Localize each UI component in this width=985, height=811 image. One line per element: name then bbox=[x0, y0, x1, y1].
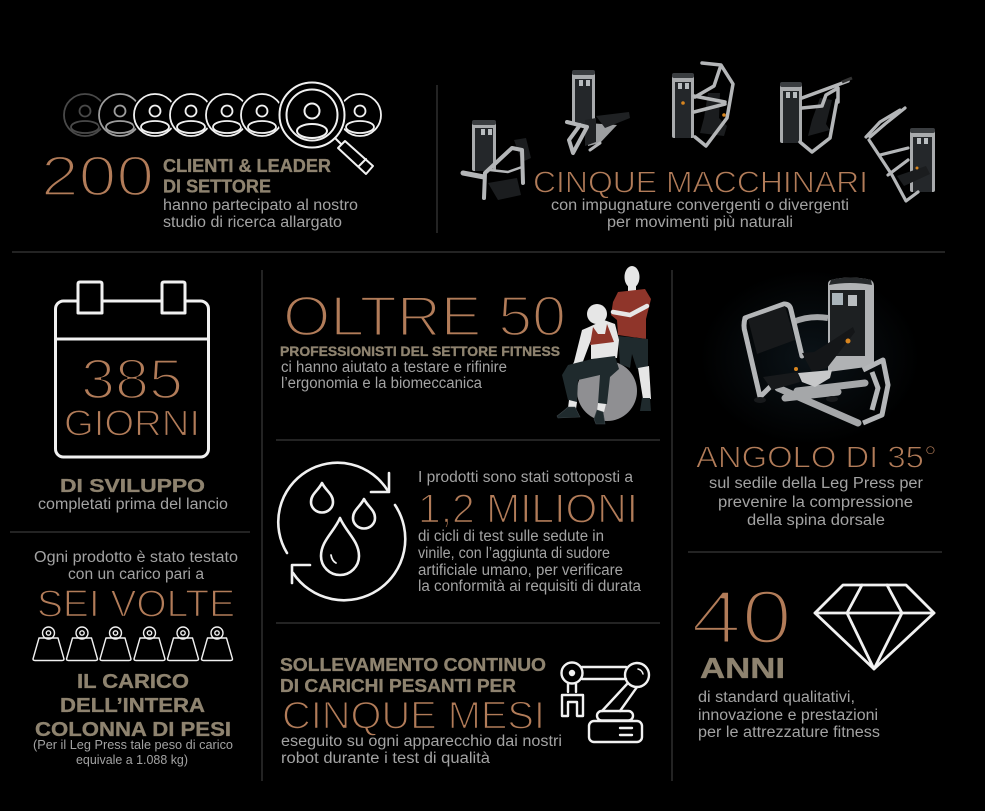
icon: row of people under magnifier bbox=[64, 80, 381, 174]
heading: cinque mesi: CINQUE MESI bbox=[282, 694, 545, 738]
text: professionals description: l’ergonomia e la biomeccanica bbox=[281, 375, 482, 392]
panel: 1.2 million cycles bbox=[278, 463, 641, 600]
text: angle description: sul sedile della Leg Press per bbox=[709, 475, 923, 492]
text: angle description: della spina dorsale bbox=[747, 512, 885, 529]
text: machines description: per movimenti più naturali bbox=[607, 214, 793, 231]
text: years description: per le attrezzature fitness bbox=[698, 724, 880, 741]
heading: whole weight stack: COLONNA DI PESI bbox=[35, 719, 231, 741]
heading: anni: ANNI bbox=[700, 653, 785, 685]
panel: 385 days bbox=[38, 282, 228, 513]
text: angle description: prevenire la compressione bbox=[718, 494, 913, 511]
icon: robot arm bbox=[562, 662, 649, 742]
big number 40: 40 bbox=[691, 576, 792, 660]
heading: di sviluppo: DI SVILUPPO bbox=[60, 475, 205, 496]
text: cycles intro: I prodotti sono stati sottoposti a bbox=[418, 469, 633, 486]
text: professionals description bbox=[281, 359, 507, 392]
heading: continuous lifting bbox=[280, 654, 546, 696]
panel: 35 degree angle bbox=[696, 270, 937, 529]
heading: clients and leaders: CLIENTI & LEADER bbox=[163, 155, 331, 176]
text: professionals description: ci hanno aiutato a testare e rifinire bbox=[281, 359, 507, 376]
icons: six weights bbox=[33, 627, 232, 660]
illustration: two athletes with ball bbox=[557, 266, 651, 424]
image: machine 1 bbox=[463, 120, 531, 200]
heading: angolo di 35: ANGOLO DI 35° bbox=[696, 440, 937, 474]
text: robots description: robot durante i test di qualità bbox=[281, 750, 490, 767]
image: machine 5 bbox=[866, 108, 935, 201]
heading: whole weight stack bbox=[35, 671, 231, 741]
text: robots description bbox=[281, 733, 562, 767]
text: leg press note bbox=[33, 737, 233, 767]
big number 200: 200 bbox=[41, 144, 154, 208]
text: load intro bbox=[34, 549, 238, 583]
panel: six times load bbox=[33, 549, 238, 767]
heading: continuous lifting: DI CARICHI PESANTI PER bbox=[280, 675, 516, 696]
image: leg press machine bbox=[744, 278, 888, 423]
text: angle description bbox=[709, 475, 923, 529]
text: cycles description: la conformità ai requisiti di durata bbox=[418, 578, 641, 595]
heading: whole weight stack: IL CARICO bbox=[77, 671, 189, 693]
text: cycles description: artificiale umano, per verificare bbox=[418, 562, 623, 579]
label giorni: GIORNI bbox=[64, 402, 200, 444]
panel: over 50 professionals bbox=[280, 266, 651, 424]
text: clients description: studio di ricerca allargato bbox=[163, 214, 342, 231]
text: leg press note: (Per il Leg Press tale peso di carico bbox=[33, 737, 233, 752]
heading: continuous lifting: SOLLEVAMENTO CONTINUO bbox=[280, 654, 546, 675]
text: years description: innovazione e prestazioni bbox=[698, 707, 878, 724]
heading: cinque macchinari: CINQUE MACCHINARI bbox=[533, 164, 868, 200]
text: development description: completati prima del lancio bbox=[38, 496, 228, 513]
text: cycles description bbox=[418, 528, 641, 595]
heading: whole weight stack: DELL’INTERA bbox=[60, 695, 205, 717]
icon: diamond bbox=[815, 585, 934, 669]
text: machines description bbox=[551, 197, 849, 231]
icon: sweat drops in cycle arrows bbox=[278, 463, 405, 600]
text: load intro: Ogni prodotto è stato testato bbox=[34, 549, 238, 566]
big number 385: 385 bbox=[81, 348, 183, 412]
panel: 40 years bbox=[691, 576, 934, 741]
icon: calendar bbox=[56, 282, 208, 457]
image: machine 4 bbox=[780, 78, 852, 152]
text: leg press note: equivale a 1.088 kg) bbox=[76, 752, 188, 767]
text: cycles description: di cicli di test sulle sedute in bbox=[418, 528, 604, 545]
heading: sei volte: SEI VOLTE bbox=[37, 584, 235, 626]
heading: 1,2 milioni: 1,2 MILIONI bbox=[418, 486, 638, 532]
text: machines description: con impugnature convergenti o divergenti bbox=[551, 197, 849, 214]
text: robots description: eseguito su ogni apparecchio dai nostri bbox=[281, 733, 562, 750]
text: years description bbox=[698, 689, 880, 741]
text: cycles description: vinile, con l’aggiunta di sudore bbox=[418, 545, 610, 562]
image: machine 3 bbox=[672, 63, 733, 146]
heading: clients and leaders: DI SETTORE bbox=[163, 176, 271, 196]
heading: clients and leaders bbox=[163, 155, 331, 196]
panel: five machines bbox=[463, 63, 935, 231]
text: clients description: hanno partecipato al nostro bbox=[163, 197, 358, 214]
subheading: fitness professionals: PROFESSIONISTI DEL SETTORE FITNESS bbox=[280, 343, 560, 359]
panel: 200 clients bbox=[41, 80, 381, 231]
text: load intro: con un carico pari a bbox=[68, 566, 204, 583]
big heading: oltre 50: OLTRE 50 bbox=[283, 284, 566, 348]
text: clients description bbox=[163, 197, 358, 231]
image: machine 2 bbox=[567, 70, 630, 153]
panel: five months lifting bbox=[280, 654, 649, 767]
text: years description: di standard qualitativi, bbox=[698, 689, 855, 706]
